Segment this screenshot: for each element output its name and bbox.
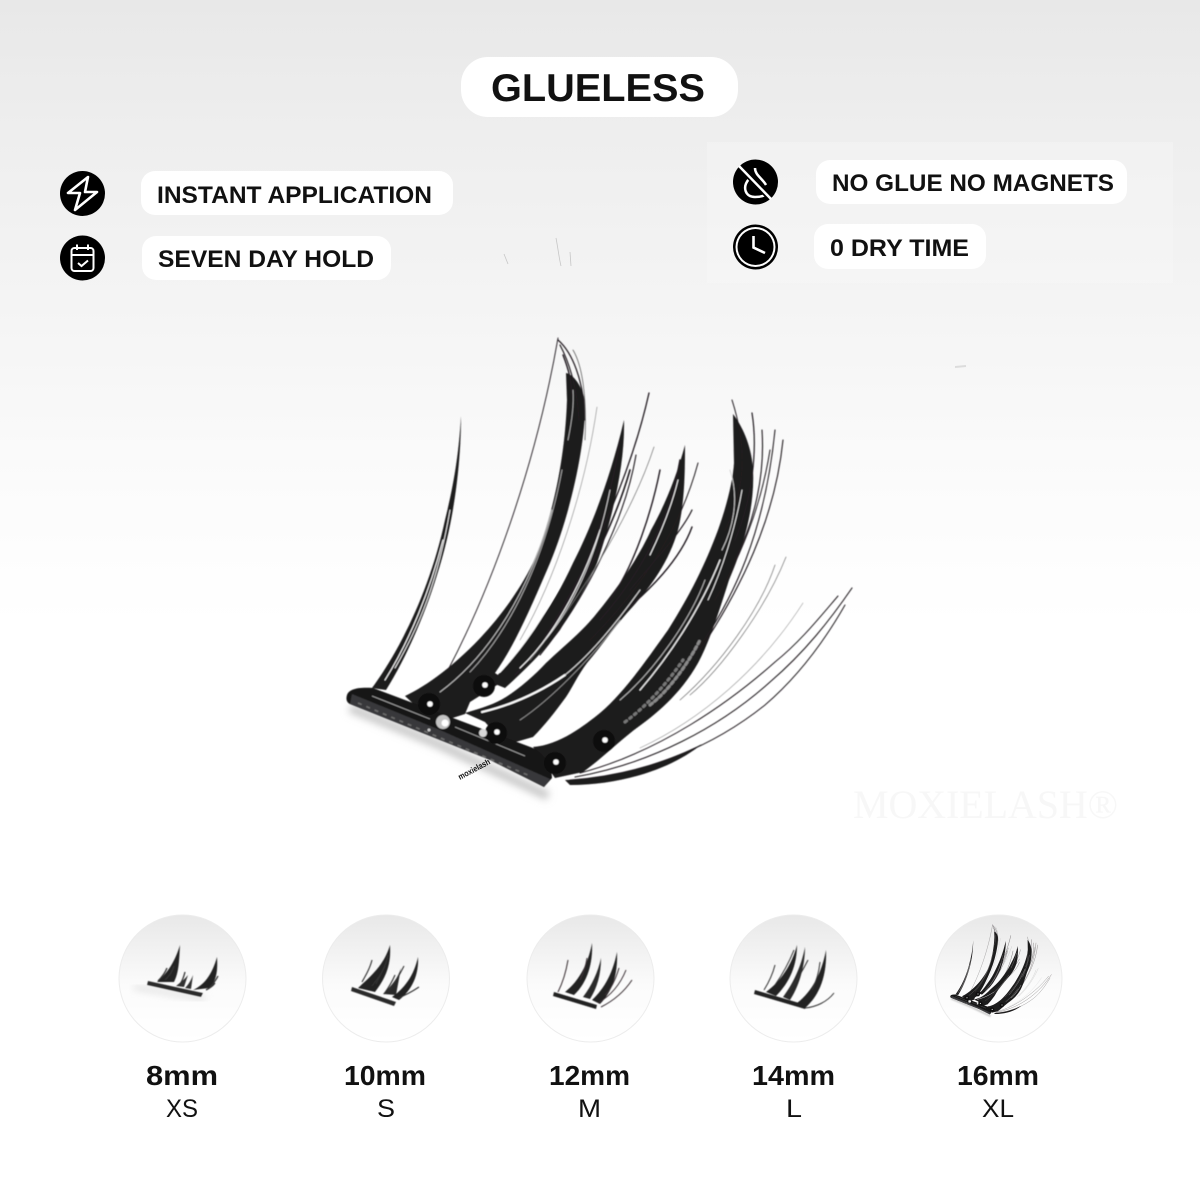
- pill: seven day hold: SEVEN DAY HOLD: [158, 246, 374, 273]
- length label: 8mm: [146, 1060, 218, 1091]
- size label: S: [377, 1095, 395, 1123]
- icon: clock: [733, 224, 778, 270]
- pill: no glue no magnets: [816, 160, 1127, 204]
- size option: 8mm: [119, 915, 246, 1123]
- lash thumbnail m: [553, 943, 632, 1009]
- pill: no glue no magnets: NO GLUE NO MAGNETS: [832, 170, 1114, 197]
- heading: glueless: [461, 57, 738, 117]
- thumbnail circle: [935, 915, 1062, 1042]
- pill: seven day hold: [142, 236, 391, 280]
- size option: 10mm: [322, 915, 450, 1123]
- length label: 10mm: [344, 1060, 426, 1091]
- panel: right features: [707, 142, 1173, 283]
- pill: instant application: INSTANT APPLICATION: [157, 182, 432, 209]
- heading: glueless: GLUELESS: [491, 67, 705, 110]
- size label: L: [786, 1095, 802, 1123]
- lash thumbnail l: [754, 945, 834, 1009]
- length label: 16mm: [957, 1060, 1039, 1091]
- pill: instant application: [141, 171, 453, 215]
- lash thumbnail xs: [134, 945, 218, 999]
- product photo: lash cluster: [346, 338, 852, 796]
- size option: 12mm: [527, 915, 654, 1123]
- faint lash flecks: [504, 238, 966, 367]
- thumbnail circle: [730, 915, 857, 1042]
- size label: XL: [982, 1095, 1014, 1123]
- watermark: MOXIELASH®: [853, 782, 1118, 827]
- size option: 16mm: [935, 915, 1062, 1123]
- icon: calendar: [60, 236, 105, 280]
- size label: XS: [166, 1095, 198, 1123]
- thumbnail circle: [527, 915, 654, 1042]
- thumbnail circle: [119, 915, 246, 1042]
- pill: 0 dry time: [814, 224, 986, 269]
- lash thumbnail xl: [950, 925, 1051, 1016]
- brand imprint: moxielash: [456, 757, 492, 782]
- feature: instant application: [60, 171, 453, 216]
- thumbnail circle: [322, 915, 450, 1042]
- size label: M: [578, 1095, 601, 1123]
- feature: seven day hold: [60, 236, 391, 280]
- length label: 12mm: [549, 1060, 630, 1091]
- length label: 14mm: [752, 1060, 835, 1091]
- icon: lightning bolt: [60, 171, 105, 216]
- size option: 14mm: [730, 915, 857, 1123]
- lash thumbnail s: [351, 945, 419, 1006]
- pill: 0 dry time: 0 DRY TIME: [830, 235, 969, 262]
- icon: no glue drop: [733, 160, 778, 204]
